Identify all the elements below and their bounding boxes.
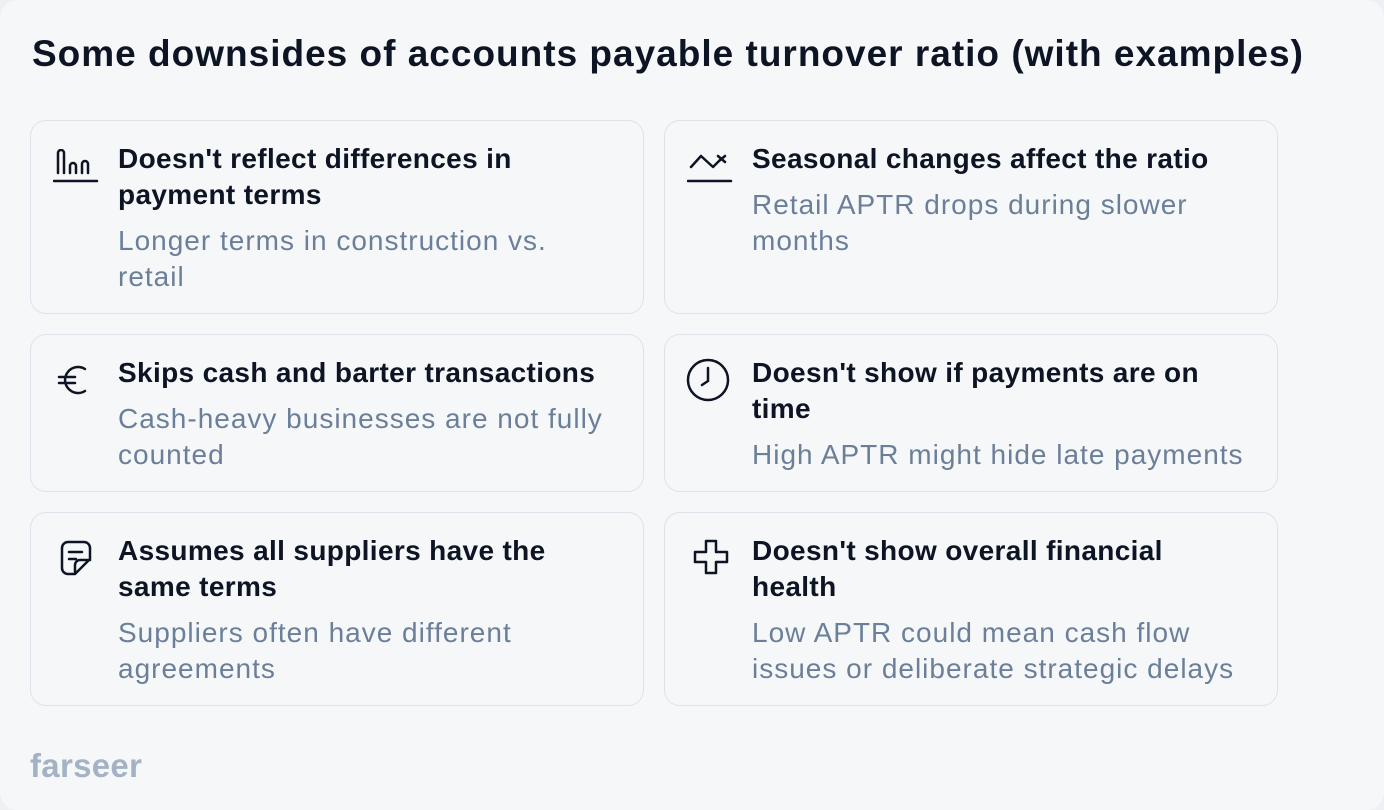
text: on time — [752, 357, 1244, 470]
text: on time: Doesn't show if payments are on — [752, 357, 1199, 388]
text: financial health: Doesn't show overall financial — [752, 535, 1163, 566]
text: cash barter: Skips cash and barter transactions — [118, 357, 595, 388]
panel: financial health — [664, 512, 1278, 706]
panel: cash barter — [30, 334, 644, 492]
panel: seasonal — [664, 120, 1278, 314]
text: suppliers: Suppliers often have different — [118, 617, 512, 648]
title: Some downsides of accounts payable turnover ratio (with examples) — [32, 33, 1304, 74]
text: on time: time — [752, 393, 811, 424]
text: financial health: Low APTR could mean cash flow — [752, 617, 1190, 648]
icon: sticky note — [60, 540, 92, 576]
text: cash barter: Cash-heavy businesses are not fully — [118, 403, 603, 434]
icon: plus — [694, 540, 728, 574]
text: suppliers: Assumes all suppliers have the — [118, 535, 546, 566]
text: on time: High APTR might hide late payments — [752, 439, 1244, 470]
text: financial health: issues or deliberate strategic delays — [752, 653, 1234, 684]
logo: farseer — [30, 747, 142, 784]
text: cash barter — [118, 357, 603, 470]
icon: euro — [58, 366, 86, 394]
panel: suppliers — [30, 512, 644, 706]
text: payment terms — [118, 143, 547, 292]
text: payment terms: Longer terms in construction vs. — [118, 225, 547, 256]
text: seasonal — [752, 143, 1209, 256]
icon: clock — [686, 358, 730, 402]
text: financial health — [752, 535, 1234, 684]
text: suppliers: same terms — [118, 571, 277, 602]
text: payment terms: payment terms — [118, 179, 322, 210]
icon: bar chart — [53, 149, 98, 182]
panel: on time — [664, 334, 1278, 492]
text: seasonal: Retail APTR drops during slower — [752, 189, 1188, 220]
text: cash barter: counted — [118, 439, 225, 470]
text: seasonal: Seasonal changes affect the ratio — [752, 143, 1209, 174]
icon: zigzag — [687, 154, 732, 182]
text: suppliers: agreements — [118, 653, 276, 684]
text: suppliers — [118, 535, 546, 684]
text: payment terms: Doesn't reflect differences in — [118, 143, 512, 174]
text: payment terms: retail — [118, 261, 185, 292]
text: seasonal: months — [752, 225, 850, 256]
text: financial health: health — [752, 571, 837, 602]
panel: payment terms — [30, 120, 644, 314]
